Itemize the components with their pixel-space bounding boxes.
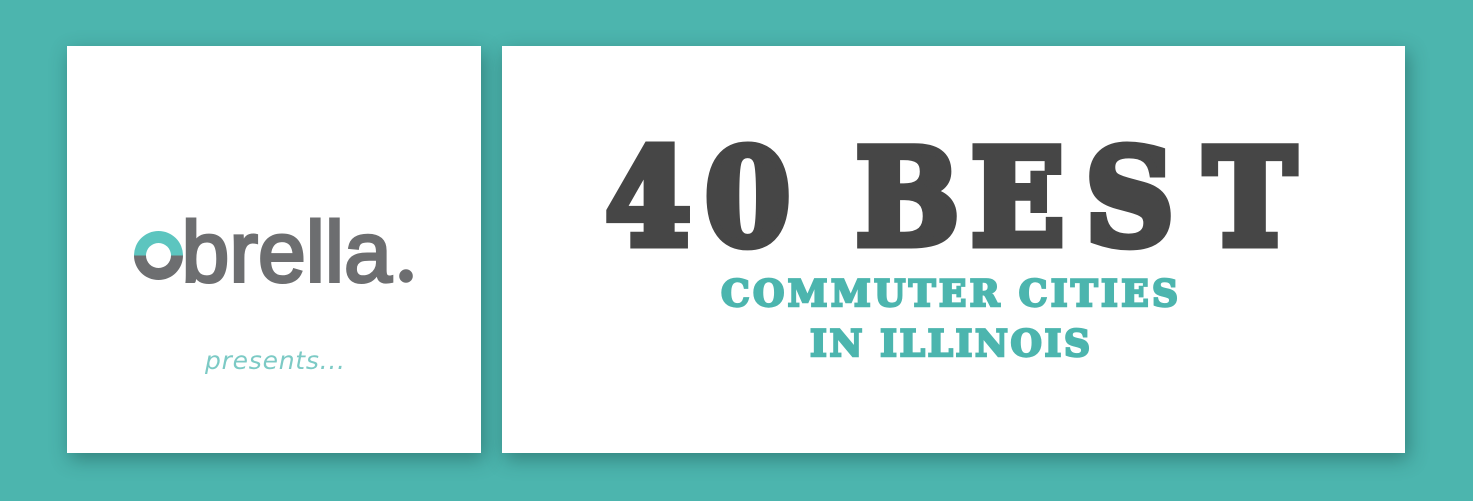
tagline: presents: presents... — [204, 346, 345, 375]
heading: 40 best: 40 BEST — [605, 121, 1296, 276]
icon: logo ring letter o — [134, 231, 183, 280]
logo period dot — [399, 269, 413, 283]
subheading: in illinois: IN ILLINOIS — [810, 323, 1090, 365]
panel: title card — [502, 46, 1405, 453]
logo: obrella — [134, 204, 415, 300]
logo wordmark: brella — [182, 204, 392, 300]
logo wordmark: . — [396, 218, 415, 296]
panel: logo card — [67, 46, 481, 453]
subheading: commuter cities: COMMUTER CITIES — [721, 273, 1178, 315]
